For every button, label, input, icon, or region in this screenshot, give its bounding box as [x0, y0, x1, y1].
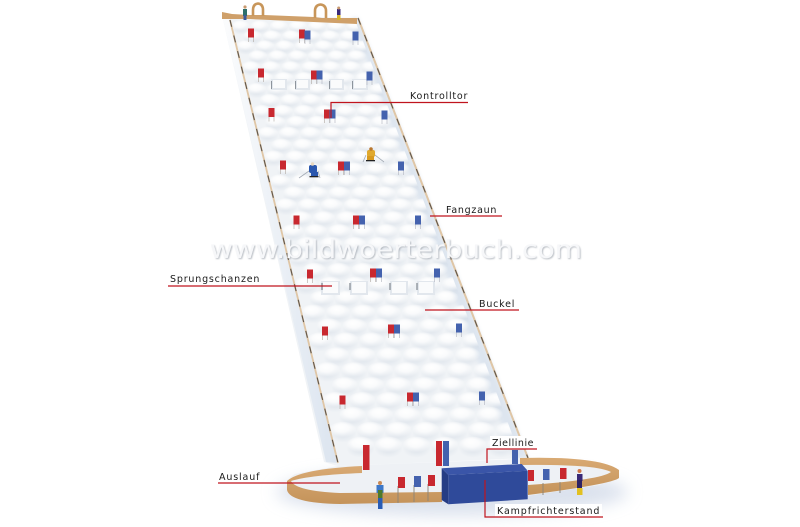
label: Kontrolltor — [331, 89, 470, 118]
finish gate, blue behind stand — [512, 450, 518, 464]
judges' stand — [442, 464, 528, 504]
label: Kontrolltor: Kontrolltor — [410, 91, 468, 102]
label: Sprungschanzen: Sprungschanzen — [170, 274, 260, 285]
ski slope surface — [222, 15, 528, 466]
large finish gate, blue — [443, 441, 449, 466]
label: Fangzaun: Fangzaun — [446, 205, 497, 216]
slope right edge shading — [351, 18, 528, 458]
run-out barrier, left part — [287, 466, 442, 504]
label: Fangzaun — [430, 203, 502, 216]
label: Ziellinie — [487, 436, 537, 463]
large finish gate, red — [436, 441, 442, 466]
label: Buckel: Buckel — [479, 299, 515, 310]
label: Kampfrichterstand: Kampfrichterstand — [497, 506, 600, 517]
top right official — [337, 6, 340, 20]
right catch fence — [358, 18, 528, 458]
label: Auslauf — [218, 472, 340, 483]
label: Ziellinie: Ziellinie — [492, 438, 534, 449]
control gates — [248, 28, 485, 409]
official in green — [376, 481, 384, 509]
large finish gate, red left — [363, 445, 370, 470]
top left official — [243, 5, 247, 20]
snow shadow around the finish area — [276, 468, 628, 516]
finish barrier, right part — [520, 458, 619, 495]
skier blue — [299, 162, 320, 178]
label: Auslauf: Auslauf — [219, 472, 260, 483]
start gates band — [222, 4, 357, 24]
watermark: www.bildwoerterbuch.com — [210, 235, 582, 264]
label: Kampfrichterstand — [485, 480, 603, 517]
lower jump ramps — [321, 281, 435, 295]
finish flags left — [398, 475, 435, 503]
upper jump ramps — [271, 79, 368, 90]
finish area snow — [288, 458, 615, 501]
left catch fence — [230, 20, 338, 463]
slope left side wall — [222, 15, 338, 463]
label: Buckel — [425, 297, 519, 310]
skier yellow — [363, 147, 384, 162]
moguls — [231, 20, 523, 458]
official in purple — [577, 469, 582, 495]
finish flags right — [528, 468, 566, 495]
